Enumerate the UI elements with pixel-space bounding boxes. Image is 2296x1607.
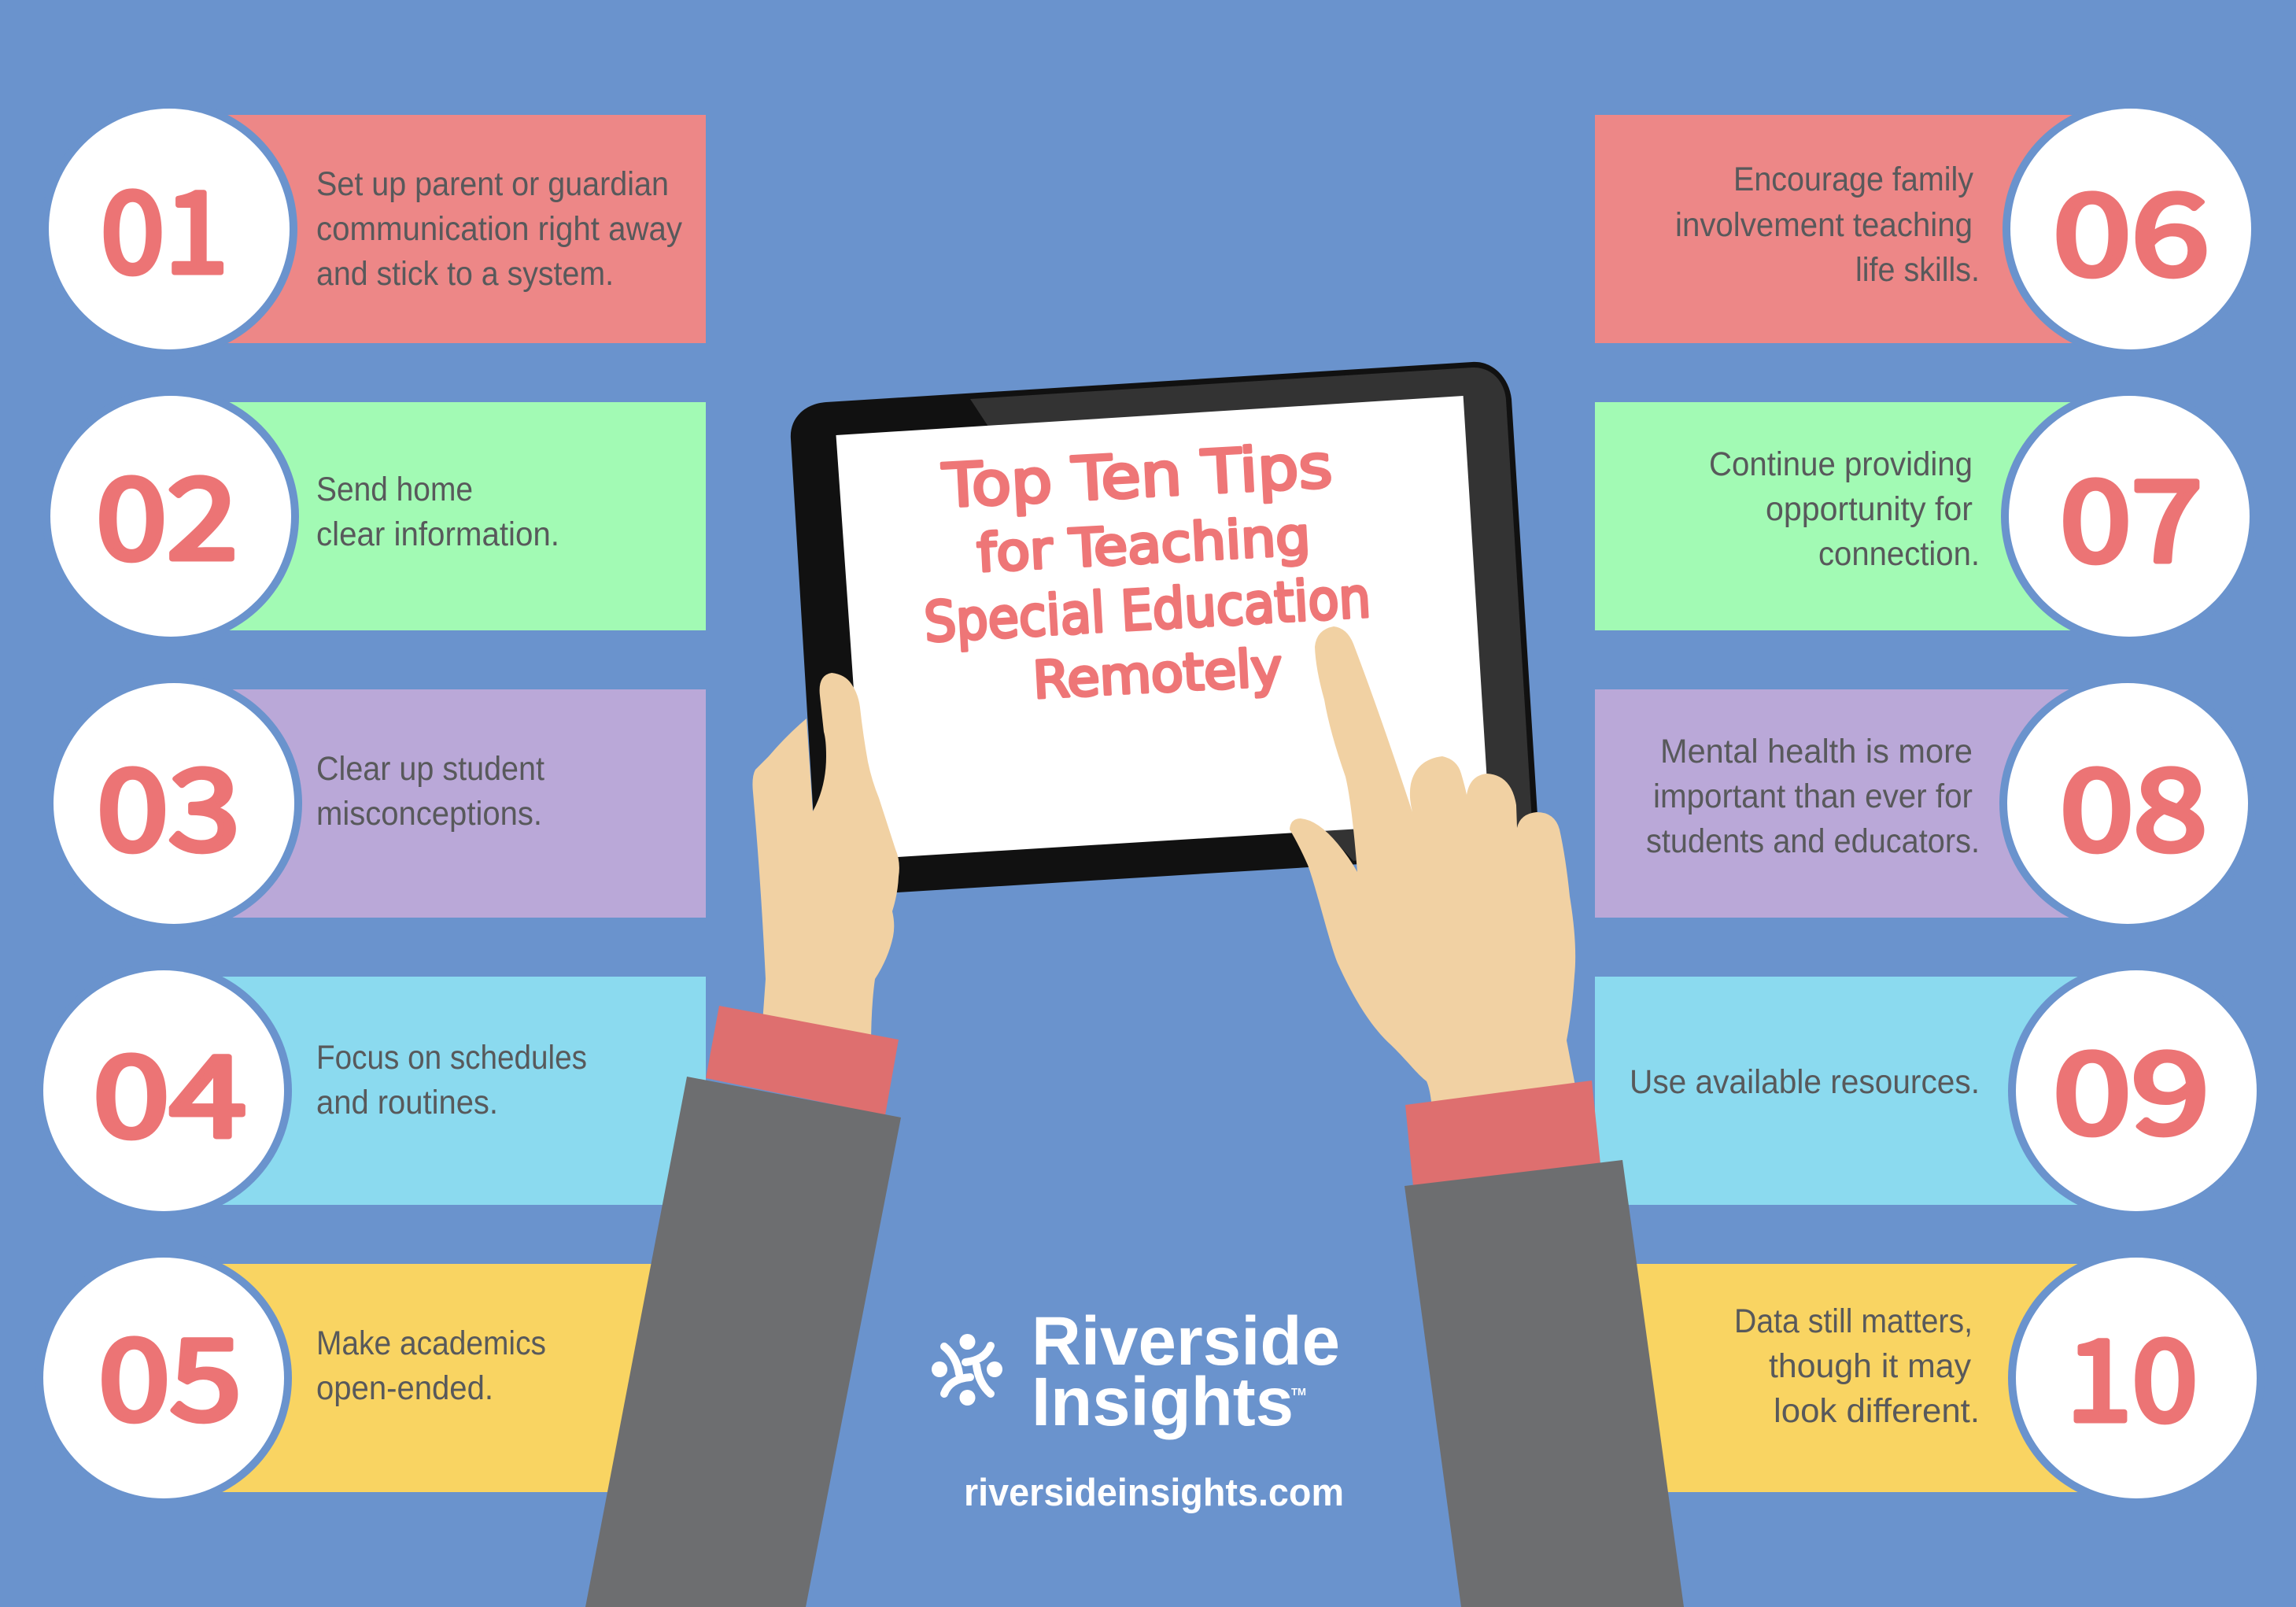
panel: tip 07: connection.: [1818, 535, 1980, 573]
panel: tip 10: [1595, 1250, 2265, 1506]
panel: tip 08: 08: [2060, 720, 2207, 882]
panel: tip 01: [41, 101, 706, 357]
title: Remotely: [1032, 638, 1283, 711]
title: [922, 430, 1372, 711]
panel: tip 10: Data still matters,: [1734, 1302, 1973, 1340]
panel: tip 10: look different.: [1774, 1392, 1980, 1430]
panel: tip 07: opportunity for: [1766, 490, 1973, 528]
panel: tip 01: and stick to a system.: [316, 255, 614, 293]
panel: tip 03: misconceptions.: [316, 795, 542, 833]
panel: tip 04: 04: [93, 1007, 246, 1169]
panel: tip 01: communication right away: [316, 210, 682, 248]
logo wordmark: [1032, 1303, 1340, 1440]
panel: tip 06: life skills.: [1855, 251, 1980, 289]
panel: tip 05: open-ended.: [316, 1369, 493, 1407]
panel: tip 01: 01: [101, 142, 228, 305]
panel: tip 07: 07: [2060, 431, 2202, 593]
panel: tip 03: [46, 675, 706, 932]
panel: tip 07: [1595, 388, 2257, 645]
logo wordmark: Riverside: [1032, 1303, 1340, 1380]
panel: tip 02: [42, 388, 706, 645]
panel: tip 02: clear information.: [316, 515, 559, 553]
panel: tip 01: Set up parent or guardian: [316, 165, 669, 203]
left hand: [752, 673, 899, 1047]
panel: tip 08: students and educators.: [1646, 822, 1980, 860]
icon: Riverside Insights logo mark: [932, 1334, 1002, 1406]
panel: tip 03: Clear up student: [316, 750, 544, 788]
panel: tip 06: [1595, 101, 2259, 357]
website url: riversideinsights.com: [964, 1472, 1344, 1514]
logo wordmark: Insights: [1032, 1364, 1294, 1440]
panel: tip 05: 05: [98, 1290, 242, 1452]
left sleeve: [585, 1006, 901, 1607]
title: for Teaching: [976, 506, 1312, 584]
panel: tip 10: though it may: [1769, 1347, 1971, 1385]
panel: tip 08: Mental health is more: [1660, 733, 1973, 770]
panel: tip 06: Encourage family: [1733, 161, 1973, 198]
panel: tip 04: [35, 962, 706, 1219]
panel: tip 04: Focus on schedules: [316, 1039, 587, 1077]
tablet: [791, 362, 1540, 897]
right sleeve: [1405, 1081, 1684, 1607]
panel: tip 08: important than ever for: [1653, 778, 1973, 815]
panel: tip 02: 02: [96, 429, 238, 591]
panel: tip 09: [1595, 962, 2265, 1219]
panel: tip 08: [1595, 675, 2256, 932]
panel: tip 09: 09: [2053, 1003, 2209, 1166]
panel: tip 05: [35, 1250, 706, 1506]
right hand: [1290, 626, 1576, 1110]
panel: tip 06: involvement teaching: [1675, 206, 1973, 244]
title: Top Ten Tips: [940, 430, 1334, 521]
panel: tip 10: 10: [2066, 1291, 2198, 1453]
panel: tip 06: 06: [2053, 145, 2209, 307]
panel: tip 05: Make academics: [316, 1324, 546, 1362]
logo wordmark: TM: [1291, 1386, 1306, 1398]
panel: tip 09: Use available resources.: [1630, 1063, 1980, 1101]
panel: tip 02: Send home: [316, 471, 473, 508]
panel: tip 04: and routines.: [316, 1084, 498, 1121]
panel: tip 07: Continue providing: [1709, 445, 1973, 483]
panel: tip 03: 03: [97, 720, 240, 882]
title: Special Education: [922, 565, 1372, 655]
